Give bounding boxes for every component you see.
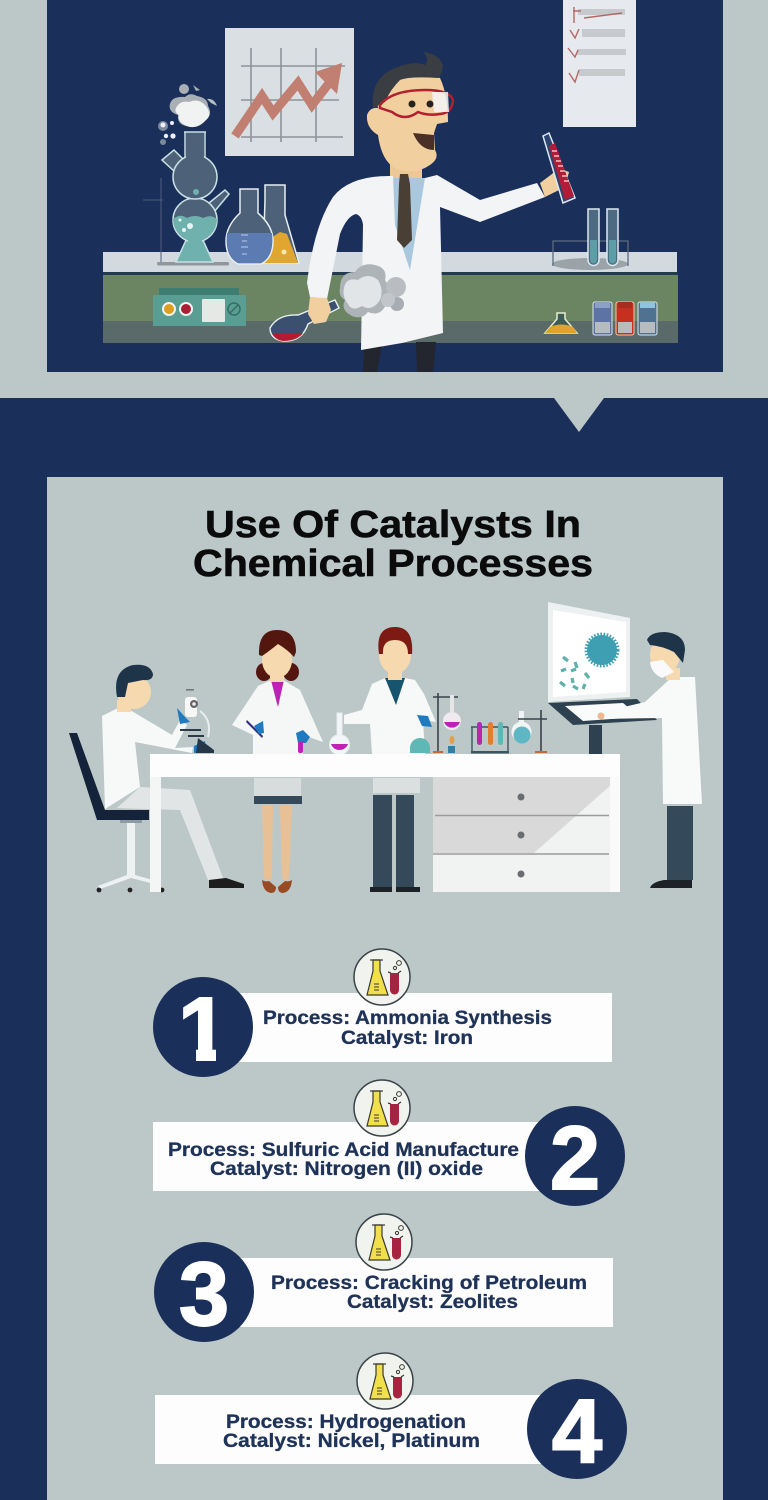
head bbox=[367, 72, 448, 172]
row text: Catalyst: Nitrogen (II) oxide bbox=[210, 1159, 483, 1180]
panel: catalysts bbox=[47, 477, 723, 1500]
right hand bbox=[540, 168, 569, 197]
pink flask on bench bbox=[330, 713, 350, 755]
male scientist bbox=[344, 627, 436, 892]
chair bbox=[69, 733, 164, 892]
tie bbox=[397, 174, 412, 248]
bench bbox=[103, 252, 678, 343]
goggles bbox=[380, 90, 453, 117]
icon: flask and test tube bbox=[354, 949, 410, 1005]
number badge bbox=[525, 1106, 625, 1209]
title bbox=[193, 504, 593, 585]
row text: Process: Sulfuric Acid Manufacture bbox=[168, 1140, 519, 1161]
mouth bbox=[413, 133, 434, 150]
row text bbox=[263, 1008, 552, 1049]
stacked flasks with smoke bbox=[143, 84, 229, 266]
row text: Process: Ammonia Synthesis bbox=[263, 1008, 552, 1029]
test tubes in rack bbox=[552, 209, 628, 270]
erlenmeyer flask: orange bbox=[263, 185, 299, 263]
number badge: 1 bbox=[178, 980, 228, 1080]
left hand bbox=[308, 297, 331, 324]
hair bbox=[373, 52, 443, 108]
number badge: 2 bbox=[550, 1109, 600, 1209]
arrow: pointer notch bbox=[554, 398, 604, 432]
number badge bbox=[527, 1379, 627, 1482]
coat bbox=[307, 175, 545, 350]
row 4: Hydrogenation bbox=[155, 1353, 627, 1482]
number badge: 4 bbox=[552, 1382, 602, 1482]
number badge: 3 bbox=[179, 1245, 229, 1345]
text bar bbox=[230, 993, 612, 1062]
text bar bbox=[155, 1395, 560, 1464]
title: Chemical Processes bbox=[193, 543, 593, 585]
row 3: Cracking of Petroleum bbox=[154, 1214, 613, 1345]
row text bbox=[271, 1273, 587, 1313]
icon: flask and test tube bbox=[356, 1214, 412, 1270]
masked scientist bbox=[598, 632, 702, 888]
woman scientist bbox=[232, 630, 323, 893]
row text: Process: Hydrogenation bbox=[226, 1412, 466, 1433]
bottles bbox=[593, 302, 657, 335]
row text: Process: Cracking of Petroleum bbox=[271, 1273, 587, 1294]
smoke bbox=[340, 264, 406, 317]
row 1: Ammonia Synthesis bbox=[153, 949, 612, 1080]
legs bbox=[363, 342, 436, 372]
navy band bbox=[0, 398, 768, 1500]
checklist sheet bbox=[563, 0, 636, 127]
row text: Catalyst: Iron bbox=[341, 1028, 473, 1049]
row text: Catalyst: Nickel, Platinum bbox=[223, 1431, 480, 1452]
seated scientist bbox=[102, 665, 244, 888]
bench glassware bbox=[433, 693, 547, 754]
lab table bbox=[150, 754, 620, 892]
title: Use Of Catalysts In bbox=[205, 504, 581, 546]
row text bbox=[223, 1412, 480, 1452]
small flask on bench bbox=[545, 313, 577, 333]
microscope bbox=[180, 689, 214, 753]
number badge bbox=[153, 977, 253, 1080]
scientist bbox=[270, 52, 575, 372]
graduated cylinder bbox=[543, 133, 575, 203]
icon: flask and test tube bbox=[357, 1353, 413, 1409]
round flask: blue bbox=[226, 189, 273, 264]
small tilted flask bbox=[270, 300, 339, 341]
control box bbox=[153, 288, 246, 326]
panel: lab scene bbox=[47, 0, 723, 372]
row 2: Sulfuric Acid Manufacture bbox=[153, 1080, 625, 1209]
illustration: scientists at lab bench bbox=[69, 602, 702, 893]
text bar bbox=[153, 1122, 560, 1191]
row text: Catalyst: Zeolites bbox=[347, 1292, 518, 1313]
row text bbox=[168, 1140, 519, 1180]
icon: flask and test tube bbox=[354, 1080, 410, 1136]
number badge bbox=[154, 1242, 254, 1345]
chart poster bbox=[225, 28, 354, 156]
shirt and neck bbox=[390, 160, 422, 182]
monitor bbox=[548, 602, 657, 754]
text bar bbox=[232, 1258, 613, 1327]
